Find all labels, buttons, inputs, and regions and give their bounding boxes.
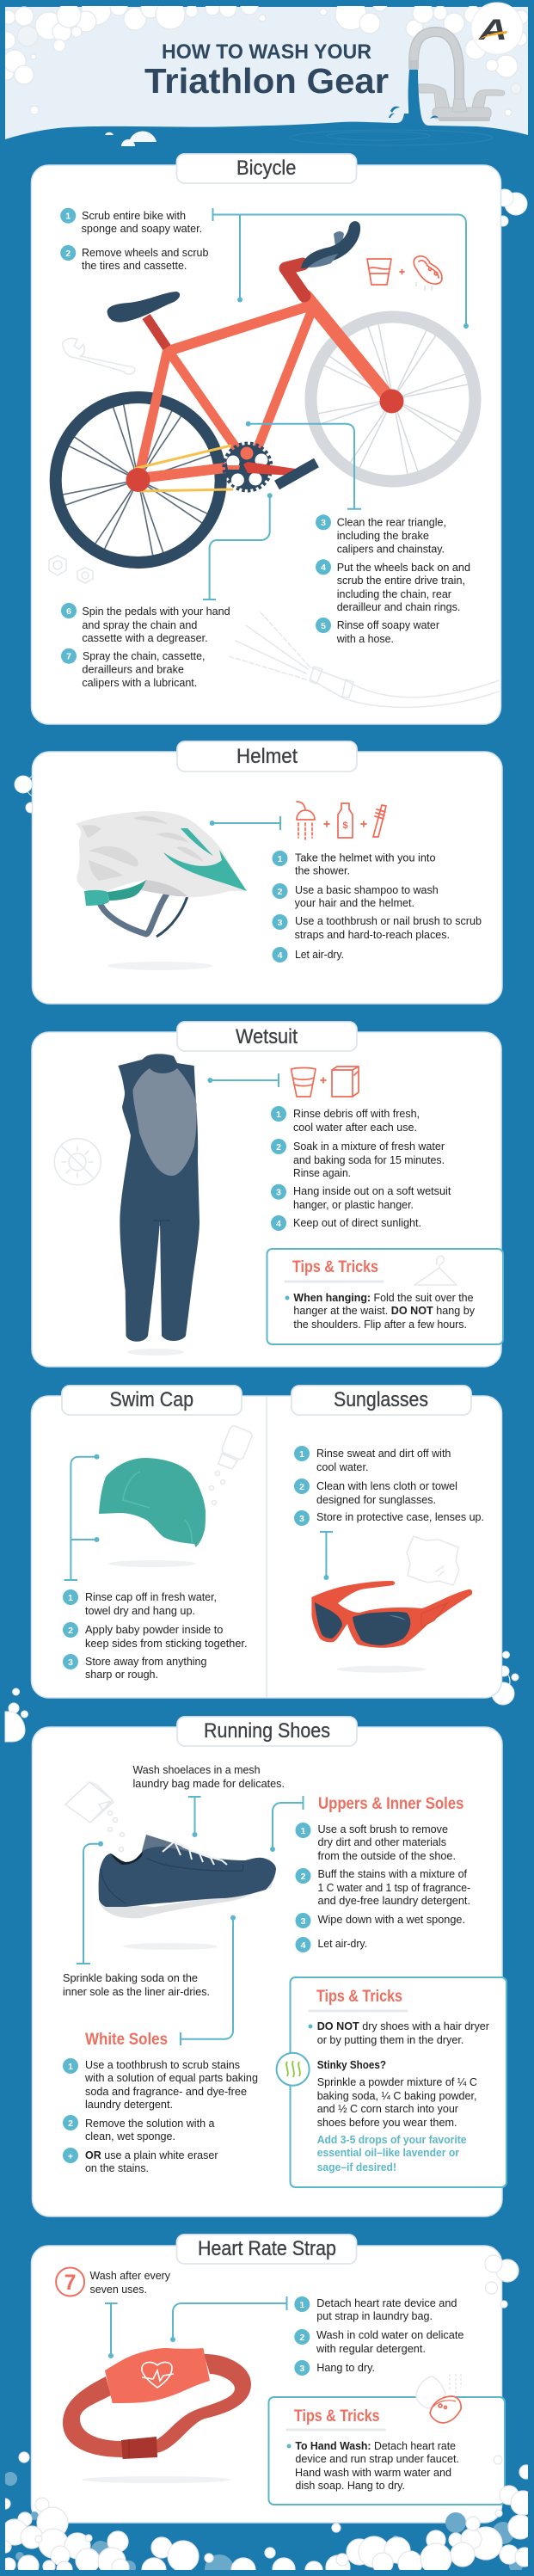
connector: steps 6 and 7: [203, 493, 273, 599]
step 2: [294, 2328, 463, 2355]
stinky shoes text: [317, 2075, 477, 2129]
step 3: straps and hard-to-reach places.: [295, 928, 450, 941]
connector: [320, 1532, 333, 1580]
swim step 3: 3: [68, 1657, 73, 1668]
logo badge: A: [478, 14, 507, 46]
tip bullet: [308, 2025, 313, 2028]
step 2: Wash in cold water on delicate: [316, 2328, 463, 2341]
step 6: 6: [66, 606, 71, 617]
step 7: calipers with a lubricant.: [82, 676, 197, 689]
step 4: 4: [321, 563, 326, 573]
sunglasses heading: Sunglasses: [334, 1388, 428, 1411]
step 5: Rinse off soapy water: [337, 618, 440, 631]
swim step 2: [63, 1622, 248, 1650]
tip bullet: [287, 2444, 291, 2448]
uppers step 1: from the outside of the shoe.: [318, 1849, 456, 1862]
icon: stink lines: [277, 2053, 310, 2086]
buckle: [121, 2437, 157, 2459]
tips heading: Tips & Tricks: [294, 2407, 380, 2425]
vents: [82, 816, 204, 881]
shadow: [123, 1943, 218, 1950]
sunglasses step 1: cool water.: [316, 1460, 368, 1473]
tip text: [293, 1291, 475, 1331]
step 4: including the chain, rear: [337, 587, 452, 600]
tip text: Hand wash with warm water and: [295, 2466, 451, 2479]
step 2: and baking soda for 15 minutes.: [293, 1153, 445, 1166]
step 2: [271, 1139, 445, 1179]
tip text: When hanging: Fold the suit over the: [293, 1291, 473, 1304]
step 3: 3: [278, 918, 283, 928]
step 1: sponge and soapy water.: [82, 222, 202, 235]
handlebar: [301, 221, 360, 268]
step 2: 2: [299, 2333, 304, 2343]
soles step 2: Remove the solution with a: [85, 2117, 215, 2130]
step 1: the shower.: [295, 864, 350, 877]
step 3: Hang inside out on a soft wetsuit: [293, 1184, 451, 1197]
faucet: [408, 32, 505, 121]
uppers step 4: Let air-dry.: [318, 1937, 367, 1950]
connector: white soles: [181, 1915, 236, 2045]
sunglasses step 2: [294, 1479, 457, 1506]
tip text: or by putting them in the dryer.: [317, 2033, 463, 2046]
wetsuit heading: Wetsuit: [236, 1025, 298, 1048]
icon: hanger: [414, 1256, 457, 1285]
baking soda note: inner sole as the liner air-dries.: [63, 1985, 210, 1998]
step 2: 2: [65, 249, 71, 259]
step 2: your hair and the helmet.: [295, 896, 414, 909]
tip text: hanger at the waist. DO NOT hang by: [293, 1304, 475, 1317]
step 3: [271, 1184, 451, 1211]
step 1: 1: [278, 854, 283, 864]
tips divider: [310, 2009, 407, 2013]
sunglasses heading: [292, 1386, 471, 1415]
step 3: 3: [321, 518, 326, 528]
baking soda note: Sprinkle baking soda on the: [63, 1971, 198, 1984]
title: [144, 40, 389, 101]
logo badge: [471, 3, 523, 54]
tips box: [268, 2374, 505, 2505]
step 1: Scrub entire bike with: [82, 209, 186, 222]
step 7: derailleurs and brake: [82, 663, 184, 676]
step 6: Spin the pedals with your hand: [82, 605, 230, 618]
step 3: Use a toothbrush or nail brush to scrub: [295, 914, 482, 927]
tip text: DO NOT dry shoes with a hair dryer: [317, 2020, 490, 2032]
uppers step 2: and dye-free laundry detergent.: [318, 1894, 470, 1907]
strap heading: Heart Rate Strap: [198, 2237, 336, 2260]
step 4: derailleur and chain rings.: [337, 600, 460, 613]
tip text: dish soap. Hang to dry.: [295, 2479, 405, 2492]
uppers step 2: Buff the stains with a mixture of: [318, 1867, 467, 1880]
tip text: the shoulders. Flip after a few hours.: [293, 1318, 467, 1331]
step 4: [271, 1215, 421, 1231]
tip text: [295, 2439, 459, 2492]
panel: running shoes: [33, 1717, 506, 2216]
swim cap heading: Swim Cap: [110, 1388, 193, 1411]
step 3: 3: [299, 2364, 304, 2374]
step 1: [271, 1106, 420, 1134]
bicycle heading: [177, 154, 356, 183]
sunglasses illustration: [311, 1581, 472, 1648]
step 2: Rinse again.: [293, 1166, 351, 1179]
sunglasses step 2: Clean with lens cloth or towel: [316, 1479, 457, 1492]
strap card: [31, 2246, 502, 2523]
uppers step 4: [296, 1937, 367, 1952]
floating soap domes: [105, 132, 157, 146]
swim step 3: sharp or rough.: [85, 1668, 158, 1681]
bike frame: [138, 297, 391, 478]
step 4: [272, 947, 344, 962]
chainring: [224, 444, 271, 490]
icon: bolts: [49, 556, 93, 583]
icon: lens cloth: [407, 1536, 459, 1585]
tip text: [317, 2020, 490, 2046]
swim step 1: [63, 1589, 217, 1617]
uppers step 1: dry dirt and other materials: [318, 1835, 446, 1848]
swim step 1: 1: [68, 1593, 73, 1603]
water stream: [397, 70, 434, 127]
seven uses note: [56, 2267, 170, 2296]
connector: [207, 1073, 279, 1087]
helmet card: [33, 752, 502, 1004]
uppers step 3: Wipe down with a wet sponge.: [318, 1913, 465, 1926]
uppers step 3: 3: [301, 1916, 306, 1927]
uppers step 1: 1: [301, 1826, 306, 1836]
uppers step 2: 2: [301, 1872, 306, 1882]
step 2: [272, 883, 439, 909]
connector: seven uses: [105, 2303, 118, 2358]
icon: cup and sponge: [367, 256, 442, 291]
wetsuit heading: [177, 1022, 357, 1051]
side bubbles: [5, 189, 527, 1742]
step 3: including the brake: [337, 529, 429, 542]
step 4: Keep out of direct sunlight.: [293, 1216, 421, 1229]
soles step 2: [63, 2115, 215, 2143]
step 2: with regular detergent.: [316, 2342, 426, 2355]
heart icon: [142, 2362, 174, 2388]
panel: helmet: [33, 741, 502, 1004]
shoes card: [33, 1727, 502, 2216]
essential oil note: sage–if desired!: [317, 2161, 396, 2173]
step 4: [316, 559, 470, 613]
connector: steps: [170, 2296, 287, 2342]
step 6: and spray the chain and: [82, 618, 197, 631]
strap illustration: [63, 2348, 251, 2459]
tips box: [267, 1249, 503, 1344]
icon: wrench: [63, 338, 135, 374]
panel: swim cap and sunglasses: [31, 1386, 502, 1698]
chest panel: [132, 1068, 197, 1176]
icon: no sun: [54, 1139, 101, 1185]
soles step or: [63, 2148, 218, 2174]
step 4: Put the wheels back on and: [337, 561, 470, 574]
uppers step 1: Use a soft brush to remove: [318, 1823, 448, 1835]
step 4: 4: [276, 1219, 281, 1229]
water splashes: [389, 107, 439, 119]
lenses: [315, 1602, 342, 1638]
step 3: calipers and chainstay.: [337, 543, 445, 556]
sunglasses step 2: designed for sunglasses.: [316, 1493, 436, 1506]
step 7: [61, 649, 205, 689]
icon: sponge: [430, 2396, 461, 2423]
connector: step 1 and 2: [213, 208, 469, 329]
sunglasses step 3: 3: [299, 1514, 304, 1524]
uppers step 2: [296, 1867, 470, 1907]
seven uses note: 7: [64, 2271, 77, 2295]
step 7: 7: [66, 652, 71, 662]
soles step 1: laundry detergent.: [85, 2098, 173, 2111]
icon: cup and baking soda: [291, 1067, 359, 1097]
step 1: 1: [276, 1110, 281, 1120]
pale blue bubbles: [3, 2472, 523, 2576]
swim step 2: Apply baby powder inside to: [85, 1623, 223, 1636]
step 5: with a hose.: [336, 632, 394, 645]
step 5: 5: [321, 621, 326, 631]
stinky shoes text: baking soda, ¼ C baking powder,: [317, 2089, 476, 2102]
panel: heart rate strap: [31, 2235, 505, 2523]
step 6: cassette with a degreaser.: [82, 631, 208, 644]
stem: [285, 264, 304, 296]
tips divider: [285, 1280, 383, 1283]
soles step 2: 2: [68, 2118, 73, 2129]
soles step or: OR use a plain white eraser: [85, 2149, 218, 2161]
step 1: Take the helmet with you into: [295, 851, 435, 864]
white bubbles: [0, 2255, 534, 2576]
footer soap bubbles: [0, 2255, 534, 2576]
step 2: Soak in a mixture of fresh water: [293, 1140, 445, 1153]
swim cap heading: [62, 1386, 242, 1415]
step 1: Detach heart rate device and: [316, 2296, 457, 2309]
collar: [110, 1851, 143, 1865]
crank: [243, 462, 296, 476]
swim step 1: Rinse cap off in fresh water,: [85, 1590, 217, 1603]
helmet illustration: [76, 811, 247, 937]
shadow: [82, 2476, 231, 2483]
sole shadow: [100, 1875, 275, 1918]
uppers step 4: 4: [301, 1940, 306, 1951]
step 3: [316, 514, 446, 556]
tip text: device and run strap under faucet.: [295, 2452, 459, 2465]
icon: shower, shampoo, brush: [297, 802, 386, 839]
upper: [99, 1847, 276, 1907]
swim step 3: [63, 1654, 206, 1681]
step 2: [60, 245, 208, 272]
rear hub: [126, 468, 150, 492]
soles step 1: [63, 2058, 258, 2111]
chain: [134, 446, 233, 491]
step 4: scrub the entire drive train,: [337, 574, 465, 587]
tongue: [142, 1835, 191, 1858]
soles step or: +: [68, 2152, 73, 2162]
shoelace note: Wash shoelaces in a mesh: [132, 1763, 260, 1776]
step 1: cool water after each use.: [293, 1121, 417, 1134]
shell: [76, 811, 247, 897]
strap: [100, 882, 175, 934]
pedal: [277, 463, 316, 485]
icon: baby powder: [210, 1424, 253, 1505]
soles step 1: Use a toothbrush to scrub stains: [85, 2058, 240, 2071]
sunglasses step 1: [294, 1446, 451, 1473]
shadow: [337, 1666, 427, 1673]
laces: [163, 1841, 227, 1865]
tip text: To Hand Wash: Detach heart rate: [295, 2439, 456, 2452]
teal trim: [84, 828, 247, 906]
soles step 2: clean, wet sponge.: [85, 2130, 175, 2143]
soles step 1: with a solution of equal parts baking: [84, 2071, 258, 2084]
seven uses note: seven uses.: [89, 2283, 147, 2296]
step 2: 2: [278, 887, 283, 897]
essential oil note: Add 3-5 drops of your favorite: [317, 2133, 467, 2146]
sunglasses step 1: Rinse sweat and dirt off with: [316, 1447, 451, 1460]
front band: [105, 2348, 210, 2403]
title line 1: HOW TO WASH YOUR: [162, 40, 371, 64]
panel: bicycle: [31, 154, 500, 724]
connector: inner sole: [77, 1841, 103, 1964]
sunglasses step 2: 2: [299, 1482, 304, 1492]
step 2: Remove wheels and scrub: [82, 246, 208, 259]
shared card: [31, 1396, 502, 1698]
swim step 1: towel dry and hang up.: [85, 1604, 195, 1617]
connector: steps 3 to 5: [246, 421, 361, 509]
step 3: [272, 914, 482, 941]
uppers step 3: [296, 1913, 465, 1928]
step 1: Rinse debris off with fresh,: [293, 1107, 420, 1120]
seven uses note: Wash after every: [89, 2269, 170, 2282]
shadow: [108, 1560, 196, 1567]
swim step 2: keep sides from sticking together.: [85, 1637, 248, 1650]
frame: [311, 1581, 472, 1648]
step 5: [316, 618, 440, 645]
shoes heading: Running Shoes: [204, 1719, 330, 1743]
crotch seam: [153, 1220, 170, 1226]
icon: hose: [229, 612, 499, 707]
uppers heading: Uppers & Inner Soles: [318, 1795, 463, 1813]
shoe illustration: [99, 1835, 276, 1918]
loop: [63, 2354, 251, 2457]
suit body: [118, 1054, 199, 1342]
shoes heading: [177, 1717, 357, 1746]
bicycle heading: Bicycle: [236, 157, 296, 180]
strap heading: [177, 2235, 356, 2264]
soles step 1: soda and fragrance- and dye-free: [85, 2085, 247, 2098]
water ripples: [290, 130, 493, 145]
icon: hand: [416, 2376, 445, 2408]
step 1: [60, 208, 202, 235]
step 3: Hang to dry.: [316, 2361, 375, 2374]
header soap wash area: [5, 7, 528, 139]
shoelace note: laundry bag made for delicates.: [132, 1777, 285, 1790]
step 6: [61, 603, 230, 644]
step 1: put strap in laundry bag.: [316, 2309, 433, 2322]
stinky shoes text: shoes before you wear them.: [317, 2116, 457, 2129]
stitching: [101, 1858, 243, 1903]
step 3: 3: [276, 1187, 281, 1197]
step 2: Use a basic shampoo to wash: [295, 883, 439, 896]
soles step or: on the stains.: [85, 2161, 149, 2174]
tips divider: [287, 2429, 385, 2431]
sunglasses step 3: Store in protective case, lenses up.: [316, 1510, 484, 1523]
wetsuit illustration: [118, 1054, 199, 1342]
panel: wetsuit: [32, 1022, 503, 1367]
step 4: Let air-dry.: [295, 948, 344, 961]
connector: shoelaces: [188, 1797, 201, 1837]
step 3: [294, 2360, 375, 2376]
tip bullet: [285, 1295, 289, 1300]
helmet heading: [177, 741, 357, 772]
stinky shoes text: Sprinkle a powder mixture of ¼ C: [317, 2075, 477, 2088]
front hub: [380, 389, 404, 413]
step 2: the tires and cassette.: [82, 259, 187, 272]
sunglasses step 1: 1: [299, 1449, 304, 1460]
icon: shower, shampoo, brush: $: [342, 821, 348, 831]
step 1: 1: [65, 212, 71, 222]
tips box: [277, 1977, 506, 2187]
icon: baking soda box: [65, 1782, 124, 1851]
bicycle card: [31, 165, 500, 724]
soles step 1: 1: [68, 2062, 73, 2072]
swim cap illustration: [99, 1458, 206, 1547]
swim step 2: 2: [68, 1626, 73, 1636]
shoelace note: [132, 1763, 285, 1790]
step 1: [272, 851, 435, 877]
rear wheel: [52, 394, 224, 566]
saddle: [107, 292, 180, 323]
tips heading: Tips & Tricks: [292, 1258, 378, 1276]
stinky shoes heading: Stinky Shoes?: [317, 2058, 386, 2071]
baking soda note: [63, 1971, 210, 1998]
step 2: 2: [276, 1142, 281, 1153]
step 7: Spray the chain, cassette,: [83, 649, 205, 662]
wetsuit card: [32, 1032, 501, 1367]
title line 2: Triathlon Gear: [144, 61, 389, 101]
connector: uppers: [270, 1796, 303, 1852]
under shell: [141, 880, 187, 896]
white soles heading: White Soles: [85, 2031, 168, 2049]
uppers step 1: [296, 1823, 456, 1862]
step 1: [294, 2296, 457, 2322]
header bubbles: [0, 0, 528, 116]
essential oil note: [317, 2133, 467, 2173]
step 4: 4: [278, 950, 283, 961]
uppers step 2: 1 C water and 1 tsp of fragrance-: [318, 1881, 470, 1894]
step 3: hanger, or plastic hanger.: [293, 1198, 414, 1211]
connector: [210, 816, 280, 830]
column divider: [266, 1396, 267, 1698]
swim step 3: Store away from anything: [85, 1655, 206, 1668]
icon: water drops: [450, 2374, 461, 2393]
essential oil note: essential oil–like lavender or: [317, 2146, 459, 2159]
front wheel: [307, 313, 479, 485]
shadow: [107, 962, 212, 970]
step 1: 1: [299, 2300, 304, 2310]
connector: [64, 1454, 100, 1580]
stinky shoes text: and ½ C corn starch into your: [317, 2102, 459, 2115]
step 3: Clean the rear triangle,: [337, 516, 446, 529]
helmet heading: Helmet: [236, 745, 298, 768]
tips heading: Tips & Tricks: [316, 1988, 402, 2006]
seat post: [146, 317, 167, 347]
header: [0, 0, 528, 146]
shadow: [127, 1349, 184, 1356]
